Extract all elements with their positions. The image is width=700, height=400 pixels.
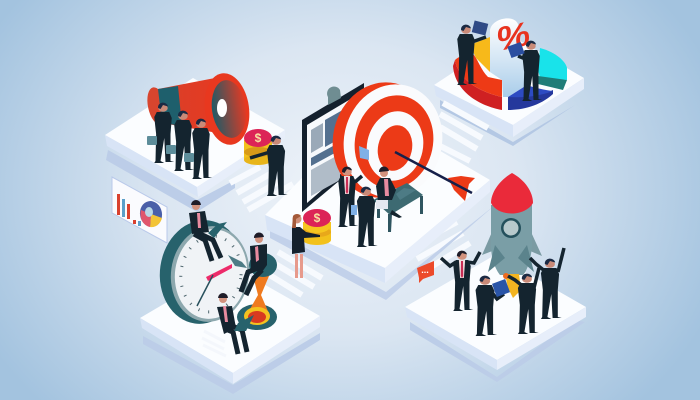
chat bubble <box>417 261 434 283</box>
analysts <box>457 20 542 101</box>
rocket flame <box>503 273 521 298</box>
coin stack <box>303 209 331 245</box>
panel: top right pie platform <box>434 15 584 146</box>
percent sign: % <box>497 15 530 59</box>
stairs: centre to rocket <box>410 222 470 270</box>
team around rocket <box>441 248 564 336</box>
stairs: centre to clock <box>268 240 330 295</box>
coin man on stairs: $ <box>255 131 262 145</box>
seated man on hourglass base <box>217 293 254 354</box>
desk <box>373 183 423 232</box>
standing men and flag <box>338 146 378 247</box>
mini pie <box>138 199 164 229</box>
coin man on stairs <box>244 129 288 196</box>
seated man at desk <box>376 166 402 218</box>
chat bubble: ... <box>421 265 429 275</box>
pie chart <box>453 15 567 110</box>
clipboard <box>302 83 364 212</box>
woman with coins <box>292 214 320 278</box>
seated man on hourglass <box>228 232 267 295</box>
panel: rocket platform <box>405 173 586 382</box>
bars <box>117 194 141 226</box>
chart card <box>112 177 167 243</box>
seated man on clock <box>189 200 227 261</box>
hourglass <box>237 253 277 330</box>
coin stack: $ <box>314 211 321 225</box>
clock <box>153 215 255 329</box>
stairs: megaphone to centre <box>230 167 293 210</box>
rocket <box>482 173 542 298</box>
dart <box>395 152 475 201</box>
panel: clock platform <box>140 200 320 394</box>
megaphone <box>144 70 254 148</box>
panel: megaphone platform <box>105 70 285 212</box>
clock hands <box>197 264 232 306</box>
panel: centre target platform <box>265 73 495 300</box>
stairs: pie to centre <box>438 103 488 161</box>
target <box>322 73 453 207</box>
people with briefcases <box>147 103 212 179</box>
small stairs <box>202 331 226 356</box>
